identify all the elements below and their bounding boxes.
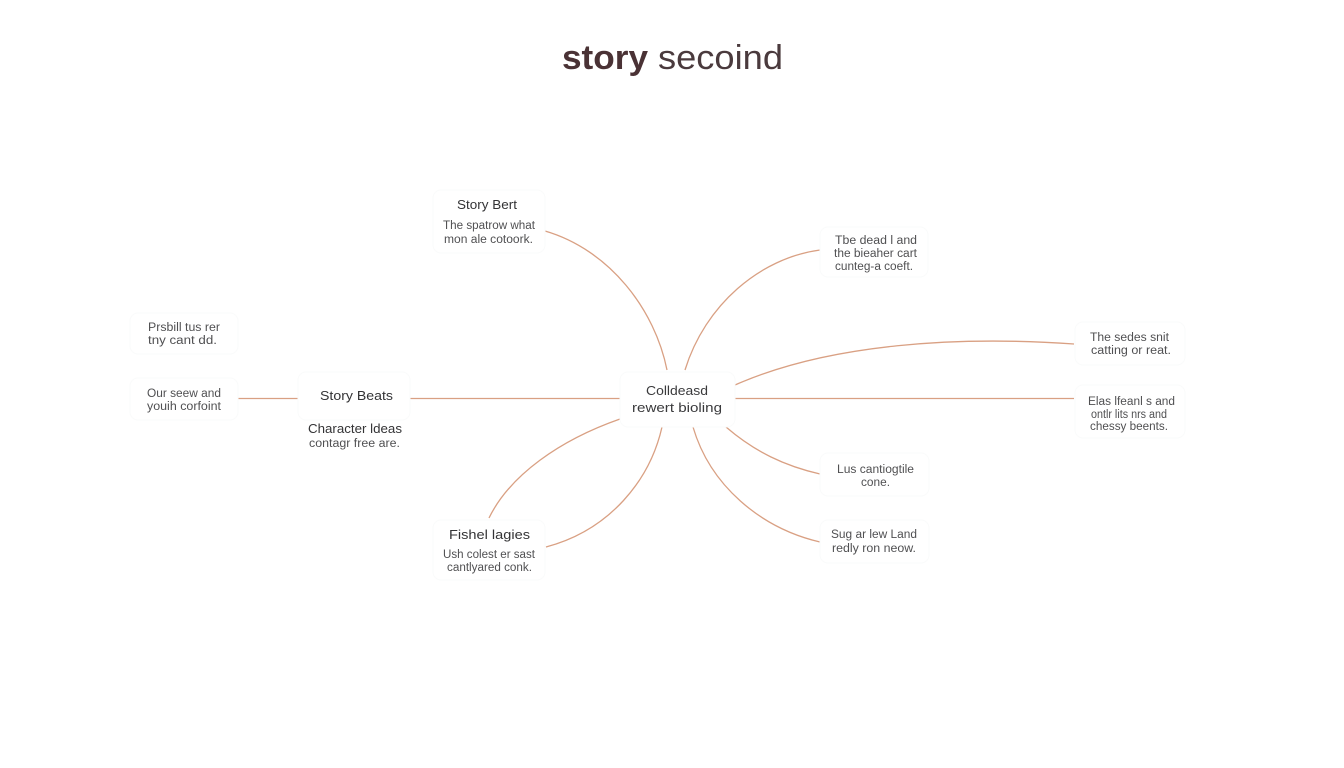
connector lines	[238, 231, 1074, 547]
node: right lower: chessy beents.	[1090, 421, 1168, 433]
node: sug: Sug ar lew Land	[831, 529, 917, 541]
node: lus: Lus cantiogtile	[837, 464, 914, 476]
node: left lower: youih corfoint	[147, 401, 222, 413]
node: story bart: The spatrow what	[443, 220, 536, 232]
node: story bart	[433, 190, 545, 253]
node: lus: cone.	[861, 477, 890, 489]
node: fishel lagies: Ush colest er sast	[443, 549, 536, 561]
node: right lower: ontlr lits nrs and	[1091, 409, 1167, 421]
node: sug	[820, 520, 929, 563]
title	[562, 39, 783, 77]
node: center	[620, 372, 735, 427]
node: fishel lagies: Fishel lagies	[449, 528, 530, 542]
node: center: Colldeasd	[646, 383, 708, 398]
node: right lower: Elas lfeanl s and	[1088, 396, 1175, 408]
title: secoind	[658, 39, 783, 77]
node: story bart: Story Bert	[457, 198, 518, 212]
node: lus	[820, 453, 929, 496]
node: right upper: The sedes snit	[1090, 332, 1170, 344]
node: top right: Tbe dead l and	[835, 235, 917, 247]
node: left upper	[130, 313, 238, 354]
node: left upper: Prsbill tus rer	[148, 322, 220, 334]
node: sug: redly ron neow.	[832, 543, 916, 555]
node: story beats	[298, 372, 410, 420]
node: top right: cunteg-a coeft.	[835, 261, 913, 273]
node: story beats: Story Beats	[320, 389, 393, 403]
node: left lower: Our seew and	[147, 388, 221, 400]
text: character ideas: Character ldeas	[308, 422, 402, 436]
text: character ideas: contagr free are.	[309, 438, 400, 450]
node: top right	[820, 227, 928, 277]
node: story bart: mon ale cotoork.	[444, 234, 533, 246]
node: right upper: catting or reat.	[1091, 345, 1171, 357]
node: left lower	[130, 378, 238, 420]
node: right upper	[1075, 322, 1185, 365]
node: fishel lagies: cantlyared conk.	[447, 562, 532, 574]
title: story	[562, 39, 648, 77]
node: top right: the bieaher cart	[834, 248, 918, 260]
node: fishel lagies	[433, 520, 545, 580]
text: character ideas	[308, 422, 402, 450]
node: left upper: tny cant dd.	[148, 335, 217, 347]
node: center: rewert bioling	[632, 400, 722, 415]
node: right lower	[1075, 385, 1185, 438]
